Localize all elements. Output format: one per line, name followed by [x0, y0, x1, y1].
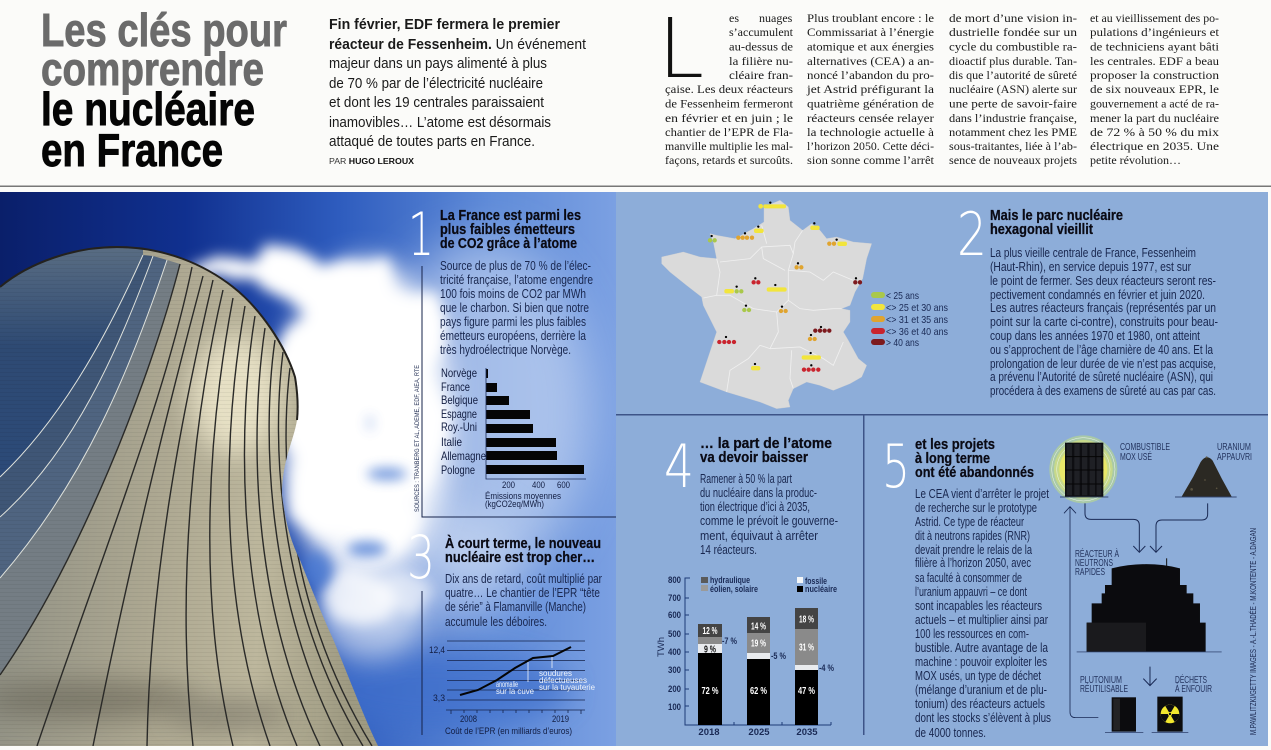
column 1: chantier de l’EPR de Fla-	[665, 125, 793, 139]
column 3: une perte de savoir-faire	[949, 96, 1077, 110]
column 2: noncé l’abandon du pro-	[807, 68, 934, 82]
bar 2025: 62 %	[750, 685, 767, 697]
annotation: soudures: soudures	[539, 668, 572, 678]
body 3: Dix ans de retard, coût multiplié par	[445, 572, 602, 586]
chart legend: éolien, solaire	[710, 584, 758, 595]
fossil percent labels: -4 %	[819, 663, 834, 674]
body 5: dont les stocks s’élèvent à plus	[915, 711, 1051, 725]
column 1: s’accumulent	[729, 25, 794, 39]
reactor markers	[708, 201, 862, 372]
body 5: MOX usés, un type de déchet	[915, 669, 1041, 683]
map legend: > 40 ans	[886, 337, 919, 349]
body 2: le point de fermer. Ses deux réacteurs seront res-	[990, 274, 1216, 288]
body 5: de recherche sur le prototype	[915, 501, 1037, 515]
column 4: pulations d’ingénieurs et	[1090, 25, 1220, 39]
arrow to waste	[1143, 667, 1157, 686]
intro text: majeur dans un pays alimenté à plus	[329, 55, 547, 72]
intro text	[329, 16, 587, 150]
annotation: soudures	[539, 657, 595, 692]
column 2: alternatives (CEA) a an-	[807, 54, 934, 68]
column 1: es nuages	[729, 11, 793, 25]
annotation: anomalie: sur la cuve	[496, 686, 534, 696]
icon: MOX fuel with glow	[1049, 435, 1117, 503]
icon: depleted uranium pile	[1175, 456, 1237, 497]
column 1: manville multiplie les mal-	[665, 139, 793, 153]
photo credits: M.PAWLITZKI/GETTY IMAGES - A.-L.THADÉE - M.KONTENTE - A.DAGAN	[1248, 528, 1258, 735]
bar chart: emissions: Belgique	[441, 393, 478, 407]
column 3: cycle du combustible ra-	[949, 40, 1077, 54]
column 2: sion sonne comme l’arrêt	[807, 153, 935, 167]
fossil percent labels: -7 %	[722, 636, 737, 647]
body 2: ou s’approchent de l’âge charnière de 40 ans. Et la	[990, 343, 1213, 357]
heading 5	[915, 437, 1034, 481]
body 1: 100 fois moins de CO2 par MWh	[440, 287, 586, 301]
column 3: dis que l’autorité de sûreté	[949, 68, 1077, 82]
body 2: La plus vieille centrale de France, Fessenheim	[990, 246, 1196, 260]
number 1: 1	[408, 200, 434, 270]
column 2: quatrième génération de	[807, 96, 934, 110]
column 4: proposer la construction	[1090, 68, 1219, 82]
column 2: la technologie actuelle à	[807, 125, 935, 139]
diagram labels: MOX USÉ	[1120, 450, 1152, 463]
bar 2035	[795, 608, 818, 725]
column 4: les centrales. EDF a beau	[1090, 54, 1219, 68]
heading 3: nucléaire est trop cher…	[445, 550, 595, 566]
diagram labels: RÉUTILISABLE	[1080, 682, 1128, 695]
tower body	[0, 240, 380, 746]
bar chart: emissions: 200	[502, 480, 515, 491]
column 3: dans l’industrie française,	[949, 111, 1077, 125]
heading 2: hexagonal vieillit	[990, 222, 1093, 238]
frame line 1	[422, 266, 616, 517]
body 4: du nucléaire dans la produc-	[700, 486, 817, 500]
heading 2	[990, 208, 1123, 238]
body 3: accumule les déboires.	[445, 615, 547, 629]
panel 1: CO2	[408, 200, 616, 517]
number 5: 5	[882, 432, 910, 502]
chart legend: hydraulique	[710, 575, 750, 586]
heading 1	[440, 208, 581, 252]
article columns	[658, 2, 1220, 167]
column 4	[1090, 11, 1220, 167]
bar chart: emissions: France	[441, 380, 470, 394]
body 4: Ramener à 50 % la part	[700, 472, 792, 486]
body 5: bustible. Autre avantage de la	[915, 641, 1048, 655]
intro text: inamovibles… L’atome est désormais	[329, 114, 551, 131]
column 1: çaise. Les deux réacteurs	[665, 82, 793, 96]
bar chart: emissions: Émissions moyennes	[485, 491, 561, 502]
body 1: que le charbon. Si bien que notre	[440, 301, 589, 315]
column 4: électrique en 2035. Une	[1090, 139, 1219, 153]
bar chart: emissions: (kgCO2eq/MWh)	[485, 499, 544, 510]
heading 1: plus faibles émetteurs	[440, 222, 575, 238]
column 3: dioactif plus durable. Tan-	[949, 54, 1077, 68]
column 3: sence de nouveaux projets	[949, 153, 1077, 167]
bar 2025	[747, 617, 770, 725]
map legend	[871, 290, 948, 349]
column 1: la filière nu-	[729, 54, 793, 68]
y axis labels	[668, 575, 681, 713]
drop cap L: L	[658, 2, 704, 97]
map legend: <> 36 et 40 ans	[886, 326, 948, 338]
line chart: EPR cost: 2019	[552, 714, 569, 725]
body 1: Source de plus de 70 % de l’élec-	[440, 259, 591, 273]
column 1: cléaire fran-	[729, 68, 793, 82]
annotation: soudures: sur la tuyauterie	[539, 682, 595, 692]
diagram labels: À ENFOUIR	[1175, 682, 1212, 695]
clouds	[187, 240, 590, 660]
column 2: l’horizon 2050. Cette déci-	[807, 139, 934, 153]
body 4: comme le prévoit le gouverne-	[700, 514, 838, 528]
intro text: de 70 % par de l’électricité nucléaire	[329, 75, 543, 92]
line chart: EPR cost	[429, 641, 595, 737]
diagram labels: PLUTONIUM	[1080, 675, 1122, 686]
y axis labels: 800	[668, 575, 681, 586]
chart legend	[701, 575, 837, 595]
blue panel right page	[616, 192, 1268, 746]
intro text: attaqué de toutes parts en France.	[329, 133, 535, 150]
bar 2018: 12 %	[702, 625, 718, 637]
bar chart: emissions: 600	[557, 480, 570, 491]
title: Les clés pour	[41, 4, 287, 56]
body 5: 100 les ressources en com-	[915, 627, 1029, 641]
icon: plutonium barrel	[1105, 697, 1143, 732]
body 3: quatre… Le chantier de l’EPR “tête	[445, 586, 600, 600]
body 5	[915, 487, 1051, 740]
column 2: atomique et aux énergies	[807, 40, 934, 54]
line chart: EPR cost: 2008	[460, 714, 477, 725]
column 1: au-dessus de	[729, 40, 793, 54]
column 4: et au vieillissement des po-	[1090, 11, 1219, 25]
bar 2035: 18 %	[799, 614, 814, 626]
column 2	[806, 11, 935, 167]
bar chart: emissions: Pologne	[441, 463, 475, 477]
body 5: de 4000 tonnes.	[915, 726, 986, 740]
title: en France	[41, 124, 223, 176]
body 5: machine : pouvoir exploiter les	[915, 655, 1047, 669]
icon: fast neutron reactor	[1077, 558, 1222, 652]
bar chart: emissions: 400	[532, 480, 545, 491]
body 2: pectivement condamnés en février et juin 2020.	[990, 288, 1205, 302]
column 3: sous-traitantes, liée à l’ab-	[949, 139, 1077, 153]
y axis labels: 300	[668, 665, 681, 676]
bar 2035: 31 %	[799, 642, 814, 654]
bar chart: emissions: Espagne	[441, 407, 477, 421]
panel 3: EPR cost	[407, 523, 602, 737]
column 2: réacteurs censée relayer	[807, 111, 934, 125]
bar 2018: 9 %	[704, 644, 716, 656]
annotation: soudures: défectueuses	[539, 675, 587, 685]
column 2: Plus troublant encore : le	[807, 11, 934, 25]
diagram labels: URANIUM	[1217, 442, 1251, 453]
body 1: émetteurs européens, derrière la	[440, 329, 586, 343]
heading 4: … la part de l’atome	[700, 436, 832, 452]
bar chart: emissions: Allemagne	[441, 449, 486, 463]
y axis labels: 200	[668, 684, 681, 695]
y axis labels: 700	[668, 593, 681, 604]
body 1: très hydroélectrique Norvège.	[440, 343, 571, 357]
heading 4: va devoir baisser	[700, 450, 808, 466]
heading 3: À court terme, le nouveau	[445, 535, 601, 552]
map legend: <> 31 et 35 ans	[886, 314, 948, 326]
line chart: EPR cost: 3,3	[433, 693, 445, 704]
heading 1: La France est parmi les	[440, 208, 581, 224]
heading 3	[445, 535, 601, 566]
body 2: point sur la carte ci-contre), construits pour beau-	[990, 315, 1218, 329]
line chart: EPR cost: Coût de l’EPR (en milliards d’euros)	[445, 726, 572, 737]
heading 5: ont été abandonnés	[915, 465, 1034, 481]
column 3: dustrielle fondée sur un	[949, 25, 1077, 39]
annotation: anomalie: anomalie	[496, 679, 518, 689]
intro text: Fin février, EDF fermera le premier	[329, 16, 560, 33]
body 3: de série” à Flamanville (Manche)	[445, 600, 586, 614]
y axis labels: 400	[668, 647, 681, 658]
diagram labels: RAPIDES	[1075, 567, 1105, 578]
panel 4: share of nuclear	[656, 432, 838, 738]
heading 4	[700, 436, 832, 466]
heading 1: de CO2 grâce à l’atome	[440, 236, 577, 252]
body 5: (mélange d’uranium et de plu-	[915, 683, 1047, 697]
body 1: pays figure parmi les plus faibles	[440, 315, 586, 329]
heading 2: Mais le parc nucléaire	[990, 208, 1123, 224]
column 4: gouvernement a acté de ra-	[1090, 96, 1219, 110]
bar chart: emissions: Norvège	[441, 366, 477, 380]
body 5: actuels – et multiplier ainsi par	[915, 613, 1048, 627]
body 5: tonium) des réacteurs actuels	[915, 697, 1045, 711]
diagram labels: RÉACTEUR À	[1075, 547, 1119, 560]
x axis labels: 2035	[796, 727, 818, 738]
body 5: dit à neutrons rapides (RNR)	[915, 529, 1030, 543]
map of France	[662, 200, 872, 409]
body 3	[445, 572, 602, 629]
bar 2018	[698, 624, 722, 725]
number 2: 2	[957, 200, 987, 270]
bar 2025: 14 %	[751, 620, 766, 632]
stacked bar chart: TWh	[656, 637, 667, 657]
fossil percent labels	[722, 636, 834, 674]
panel 5: long term projects	[882, 432, 1258, 740]
fossil percent labels: -5 %	[771, 651, 786, 662]
body 5: sont incapables les réacteurs	[915, 599, 1042, 613]
body 2: a prévenu l’Autorité de sûreté nucléaire (ASN), qui	[990, 370, 1213, 384]
number 4: 4	[664, 432, 694, 502]
bar chart: emissions: Italie	[441, 435, 462, 449]
arrows to reactor	[1085, 503, 1208, 552]
body 5: Le CEA vient d’arrêter le projet	[915, 487, 1049, 501]
body 5: devait prendre le relais de la	[915, 543, 1032, 557]
diagram labels: COMBUSTIBLE	[1120, 442, 1170, 453]
body 2: (Haut-Rhin), en service depuis 1977, est sur	[990, 260, 1191, 274]
column 3: notamment chez les PME	[949, 125, 1077, 139]
heading 5: et les projets	[915, 437, 995, 453]
body 4: ment, équivaut à arrêter	[700, 529, 818, 543]
body 2: procédera à des examens de sûreté au cas par cas.	[990, 384, 1216, 398]
number 3: 3	[407, 523, 435, 593]
title	[41, 4, 287, 176]
body 2	[990, 246, 1218, 398]
x axis labels: 2025	[748, 727, 770, 738]
map legend: < 25 ans	[886, 290, 919, 302]
body 1: tricité française, l’atome engendre	[440, 273, 593, 287]
chart legend: fossile	[805, 576, 827, 587]
frame line 3	[421, 591, 423, 735]
title: le nucléaire	[41, 83, 255, 135]
bar chart: emissions	[441, 366, 586, 510]
stacked bar chart	[656, 575, 837, 738]
y axis labels: 500	[668, 629, 681, 640]
chart legend: nucléaire	[805, 584, 837, 595]
column 2: jet Astrid préfigurant la	[806, 82, 935, 96]
fuel cycle diagram	[1049, 435, 1252, 732]
icon: radioactive waste barrel	[1152, 697, 1188, 732]
x axis labels	[698, 727, 818, 738]
panel 2: map of reactors	[662, 200, 1218, 409]
diagram labels: NEUTRONS	[1075, 558, 1113, 569]
column 4: de six nouveaux EPR, le	[1090, 82, 1219, 96]
column 4: mener la part du nucléaire	[1090, 111, 1219, 125]
line chart: EPR cost: 12,4	[429, 645, 445, 656]
body 4: tion électrique d’ici à 2035,	[700, 500, 810, 514]
body 5: filière à l’horizon 2050, avec	[915, 556, 1031, 570]
source credit: SOURCES : TRANBERG ET AL, ADEME, EDF, AIEA, RTE	[414, 364, 421, 512]
column 1: en février et en juin ; le	[665, 111, 793, 125]
y axis labels: 100	[668, 702, 681, 713]
column 3: nucléaire (ASN) alerte sur	[949, 82, 1077, 96]
diagram labels: APPAUVRI	[1217, 452, 1252, 463]
heading 5: à long terme	[915, 451, 990, 467]
column 4: de techniciens ayant bâti	[1090, 40, 1220, 54]
bar 2035: 47 %	[798, 685, 815, 697]
column 1	[665, 11, 794, 167]
body 1	[440, 259, 593, 357]
title: comprendre	[41, 43, 264, 95]
body 4: 14 réacteurs.	[700, 543, 757, 557]
bar chart: emissions: Roy.-Uni	[441, 420, 477, 434]
body 2: prolongation de leur durée de vie n’est pas acquise,	[990, 357, 1216, 371]
diagram labels: DÉCHETS	[1175, 673, 1207, 686]
column 3: de mort d’une vision in-	[949, 11, 1077, 25]
byline: PAR HUGO LEROUX	[329, 157, 415, 166]
body 5: Astrid. Ce type de réacteur	[915, 515, 1024, 529]
column 3	[949, 11, 1077, 167]
body 5: l’uranium appauvri – ce dont	[915, 585, 1027, 599]
column 2: Commissariat à l’énergie	[807, 25, 934, 39]
body 4	[700, 472, 838, 557]
body 2: Les autres réacteurs français (représentés par un	[990, 301, 1216, 315]
map legend: <> 25 et 30 ans	[886, 302, 948, 314]
photo: cooling tower with sky and clouds	[0, 192, 616, 746]
intro text: réacteur de Fessenheim. Un événement	[329, 36, 587, 53]
column 1: de Fessenheim fermeront	[665, 96, 794, 110]
body 2: coup dans les années 1970 et 1980, ont atteint	[990, 329, 1200, 343]
bar 2025: 19 %	[751, 638, 766, 650]
column 1: façons, retards et surcoûts.	[665, 153, 793, 167]
arrow: recycling loop	[1064, 507, 1098, 718]
bar 2018: 72 %	[702, 685, 719, 697]
body 5: sa faculté à consommer de	[915, 571, 1022, 585]
x axis labels: 2018	[698, 727, 720, 738]
column 4: de 72 % à 50 % du mix	[1090, 125, 1219, 139]
intro text: et dont les 19 centrales paraissaient	[329, 94, 545, 111]
diagram labels	[1075, 442, 1252, 695]
column 4: petite révolution…	[1090, 153, 1181, 167]
annotation: anomalie	[496, 662, 534, 696]
y axis labels: 600	[668, 610, 681, 621]
